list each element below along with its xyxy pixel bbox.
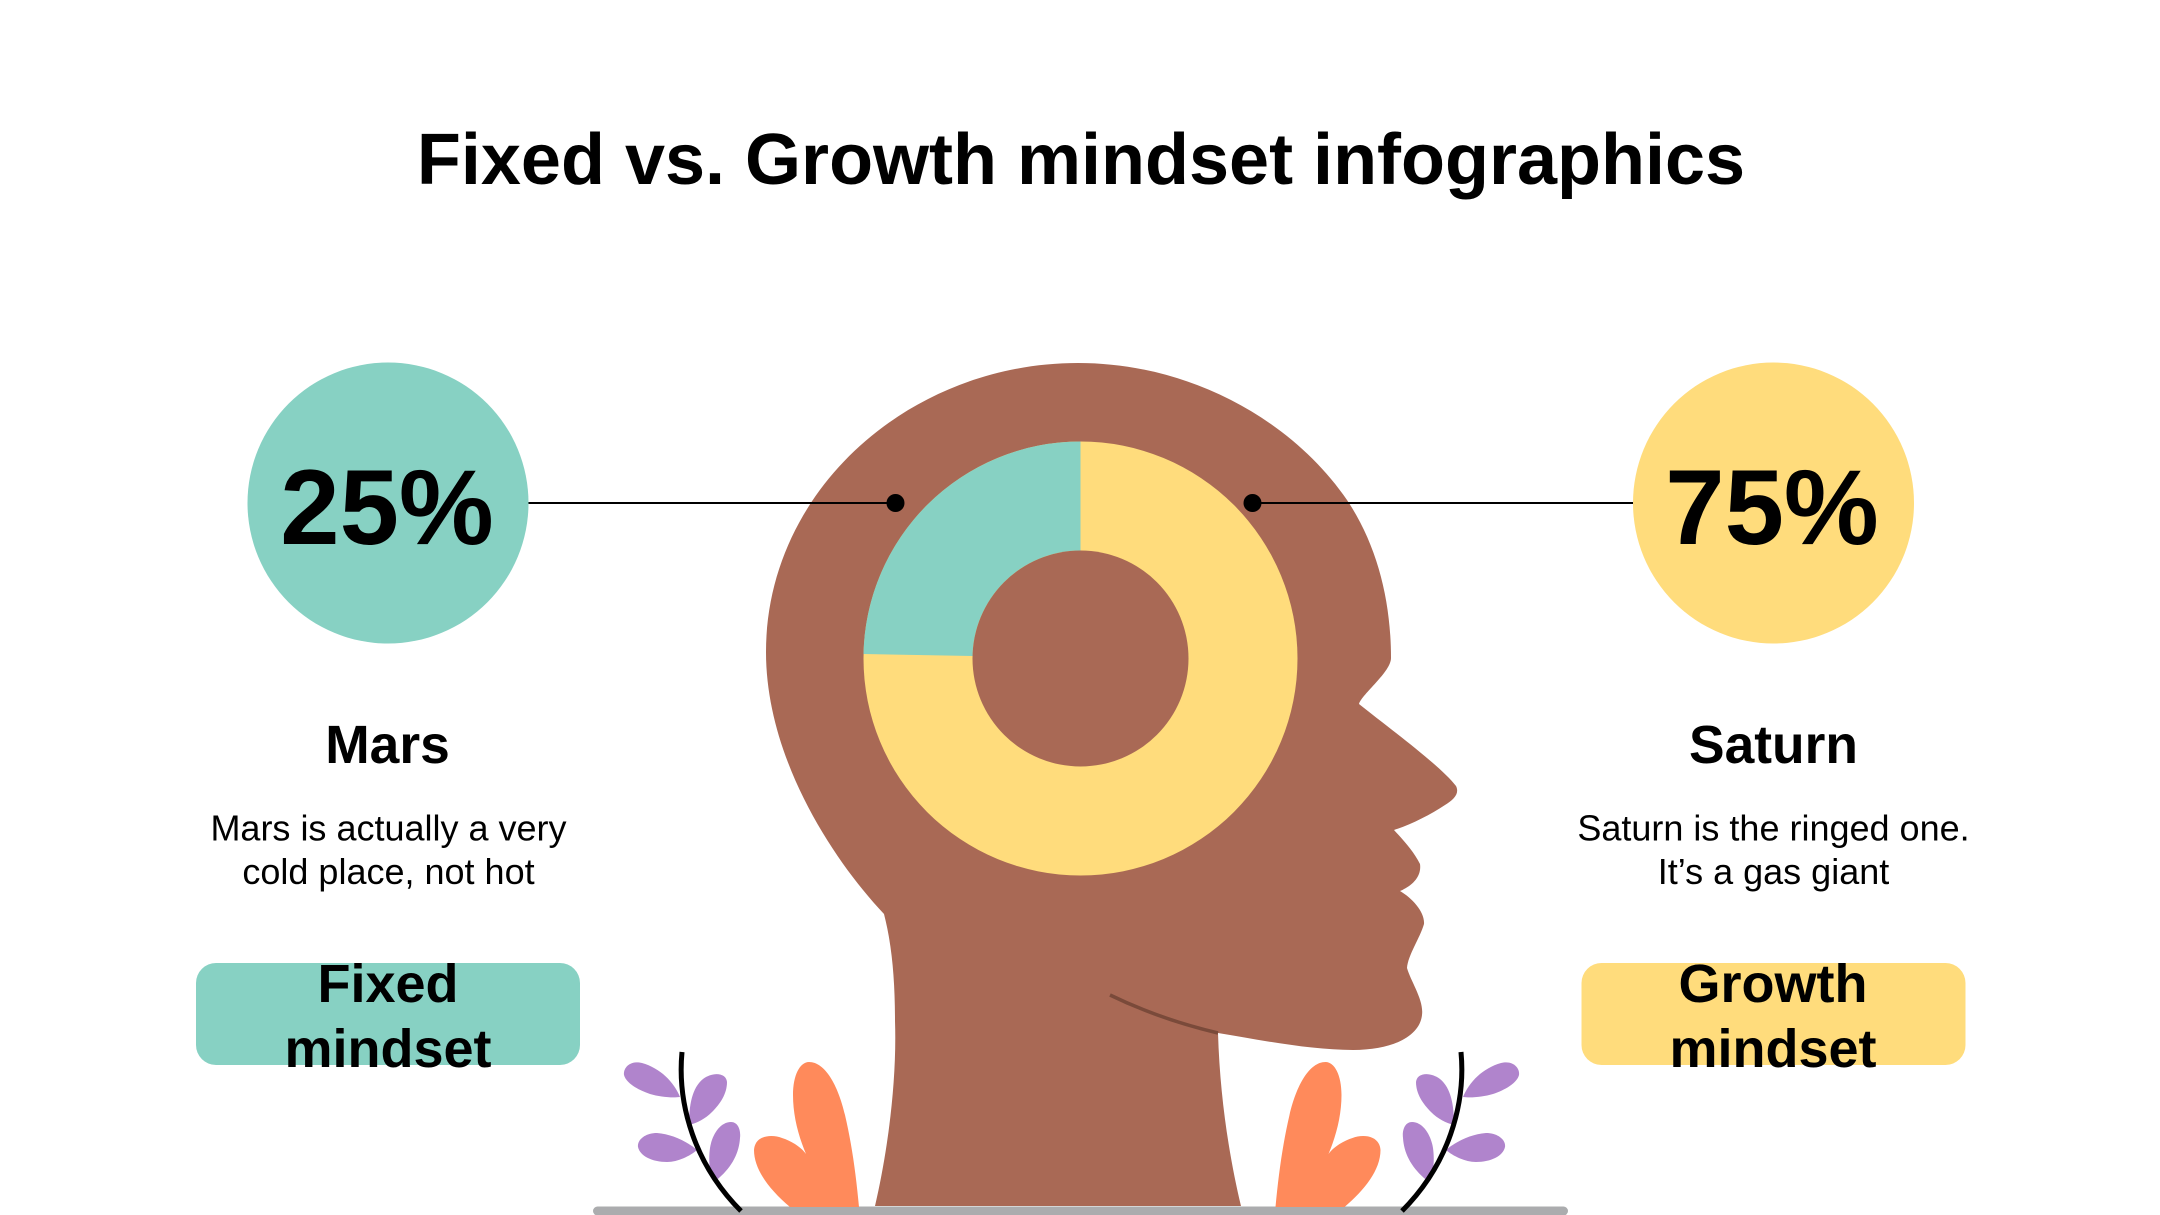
description: Saturn: Saturn is the ringed one. [1577, 808, 1970, 848]
donut hole [972, 550, 1188, 766]
heading: Saturn: Saturn [1689, 716, 1858, 775]
head silhouette [766, 363, 1457, 1206]
donut segment: 75% yellow [864, 442, 1298, 876]
label: Fixed mindset [196, 954, 580, 1079]
stat circle 25% [248, 362, 528, 644]
plant: right purple sprig [1402, 1052, 1519, 1211]
description: Mars: cold place, not hot [242, 851, 535, 892]
title: Fixed vs. Growth mindset infographics [417, 120, 1745, 200]
stat circle 75%: 75% [1665, 447, 1879, 567]
connector dot: right [1244, 494, 1262, 512]
plant: left purple sprig [624, 1052, 741, 1211]
ground bar [593, 1206, 1568, 1215]
heading: Mars: Mars [325, 716, 450, 775]
donut chart [864, 441, 1298, 876]
panel: Saturn [1577, 362, 1970, 1079]
label: Fixed mindset: mindset [284, 1019, 492, 1079]
plant: right orange bush [1276, 1062, 1380, 1207]
stat circle 25%: 25% [280, 447, 494, 567]
panel: Mars [196, 362, 580, 1079]
label: Fixed mindset: Fixed [317, 954, 459, 1014]
stat circle 75% [1633, 362, 1914, 644]
label: Growth mindset: Growth [1679, 954, 1867, 1014]
connector line: Saturn to chart [1252, 502, 1634, 504]
label: Growth mindset: mindset [1669, 1019, 1877, 1079]
label: Growth mindset [1582, 954, 1966, 1079]
donut segment: 25% teal [864, 441, 1080, 656]
plant: left orange bush [754, 1062, 859, 1207]
connector line: Mars to chart [528, 502, 895, 504]
description: Mars: Mars is actually a very [210, 808, 567, 848]
panel: head illustration [593, 363, 1568, 1215]
jaw line [1110, 995, 1218, 1033]
description: Saturn: It’s a gas giant [1658, 851, 1889, 892]
connector dot: left [886, 494, 904, 512]
